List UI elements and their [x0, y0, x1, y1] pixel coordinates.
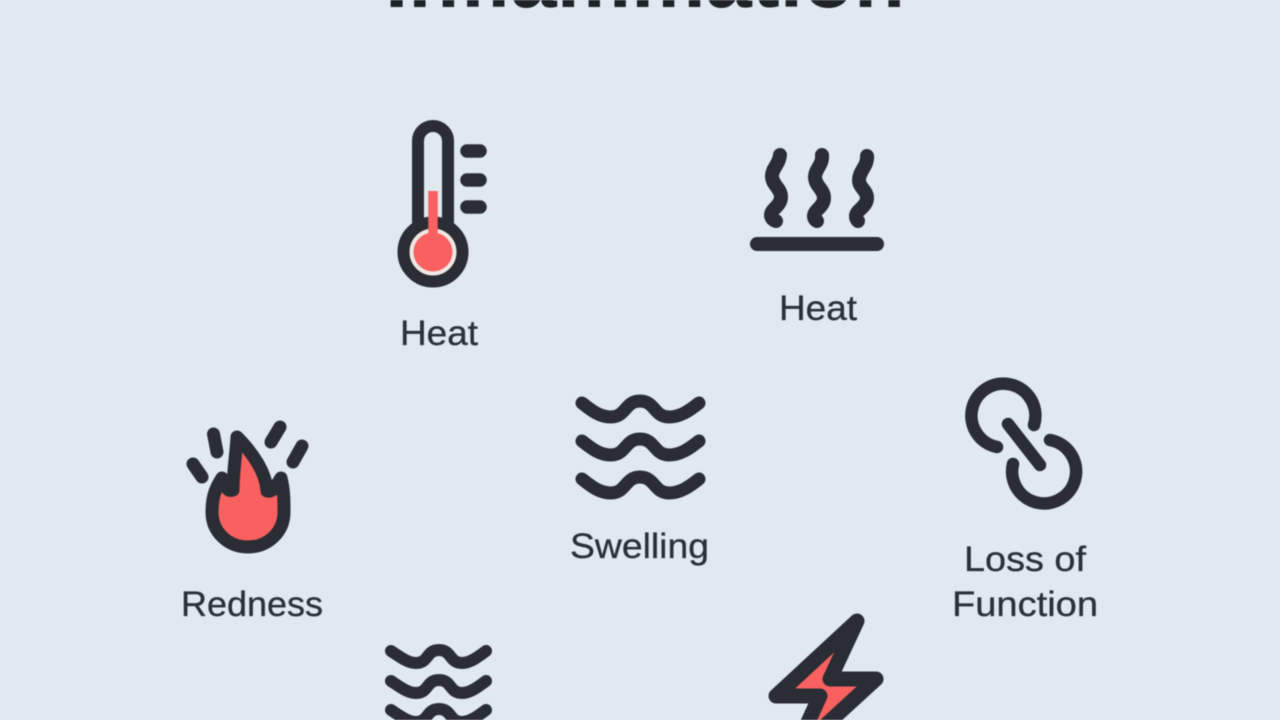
label: loss of function: [952, 540, 1098, 624]
panel: loss of function: [952, 384, 1098, 624]
panel: redness: [181, 427, 323, 624]
label: loss of function: Function: [952, 585, 1098, 624]
label: heat: Heat: [400, 314, 478, 353]
icon: swelling waves: [582, 401, 699, 493]
icon: flame: [193, 427, 302, 547]
label: loss of function: Loss of: [964, 540, 1086, 579]
panel: heat waves: [757, 155, 877, 328]
icon: rising heat waves: [757, 155, 877, 244]
icon: lightning bolt: [776, 621, 876, 720]
icon: broken link: [971, 384, 1076, 503]
panel: heat thermometer: [400, 126, 480, 353]
label: swelling: Swelling: [570, 527, 709, 566]
icon: cropped waves: [391, 650, 486, 720]
label: redness: Redness: [181, 585, 323, 624]
panel: swelling: [570, 401, 709, 566]
label: heat: Heat: [779, 289, 857, 328]
icon: thermometer: [404, 126, 480, 282]
